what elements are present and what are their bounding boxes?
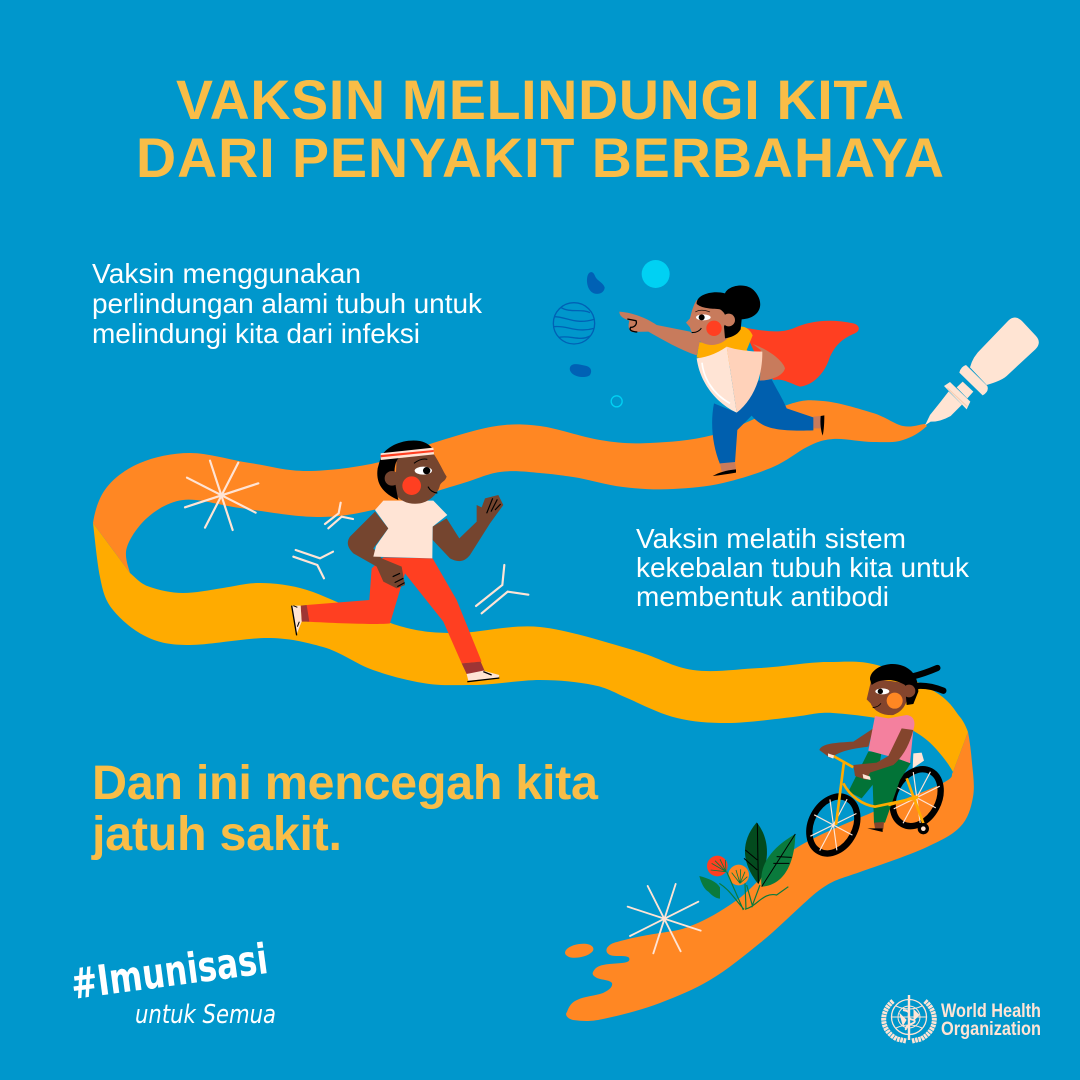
head [686, 299, 735, 345]
back shoe [292, 606, 302, 635]
hair [377, 441, 433, 500]
cape [743, 321, 859, 387]
trainer wheel [918, 823, 929, 834]
dropper ring [944, 382, 970, 409]
antibody small [325, 503, 353, 528]
shield [697, 347, 762, 413]
ear [903, 685, 915, 697]
cheek [706, 321, 722, 336]
text block: conclusion: jatuh sakit. [91, 807, 342, 861]
leg back [848, 752, 882, 798]
braids [912, 668, 943, 691]
cheek [887, 693, 903, 709]
illustration: plants and sparkle [628, 822, 795, 953]
ribbon: lower yellow band [93, 523, 968, 772]
text block: conclusion [91, 756, 599, 861]
rear wheel [883, 761, 950, 834]
character: runner [292, 441, 503, 682]
hair [697, 285, 760, 338]
icon: vaccine dropper bottle [925, 317, 1039, 425]
leg front [873, 758, 911, 823]
cuffs [301, 605, 485, 674]
back arm [753, 344, 785, 381]
ear [722, 314, 735, 326]
trousers [712, 379, 814, 464]
shirt [868, 715, 914, 763]
tall dark leaf [744, 822, 767, 884]
ear [385, 471, 399, 486]
icon: blue blob top [587, 272, 605, 294]
ankle and shoe [867, 822, 884, 832]
neck [957, 382, 973, 398]
face [395, 453, 447, 504]
text block: natural protection: melindungi kita dari infeksi [92, 318, 420, 349]
cheek [402, 476, 421, 495]
small leaf [699, 876, 720, 899]
face [867, 678, 908, 715]
icon: cyan circle [642, 260, 670, 288]
hair [870, 664, 918, 705]
pointing arm [619, 312, 700, 355]
mouth [692, 328, 701, 332]
headband [381, 448, 434, 460]
title: DARI PENYAKIT BERBAHAYA [136, 127, 944, 189]
emblem [884, 995, 934, 1041]
antibodies and sparkle near runner [185, 461, 528, 613]
character: superhero girl with shield [619, 285, 859, 476]
icon: striped planet germ [553, 303, 595, 344]
front wheel [800, 788, 867, 862]
grip [828, 753, 871, 780]
sparkle [185, 461, 258, 530]
eye [695, 310, 711, 320]
feet [713, 415, 824, 476]
fingers [627, 319, 637, 332]
text block: natural protection: perlindungan alami tubuh untuk [92, 288, 483, 319]
collar [959, 365, 988, 395]
red flower [707, 856, 728, 876]
sparkle [628, 884, 701, 953]
text block: antibodies: Vaksin melatih sistem [636, 523, 906, 554]
text block: antibodies: membentuk antibodi [636, 581, 889, 612]
text block: conclusion: Dan ini mencegah kita [92, 756, 599, 810]
text block: natural protection: Vaksin menggunakan [92, 258, 361, 289]
title [136, 69, 944, 189]
hand lines [393, 498, 501, 587]
bike saddle [913, 753, 924, 768]
icon: small ring [611, 396, 622, 407]
icon: blue blob lower [570, 364, 591, 377]
text block: antibodies [636, 523, 970, 612]
arm near [853, 728, 913, 780]
organization name: World Health [941, 1000, 1041, 1022]
orange flower [728, 865, 749, 885]
hashtag logo [68, 934, 276, 1030]
World Health Organization logo [884, 995, 1041, 1041]
antibody large [476, 565, 528, 613]
ribbon: upper orange band [93, 400, 927, 573]
text block: antibodies: kekebalan tubuh kita untuk [636, 552, 970, 583]
mouth [428, 487, 437, 493]
arms [348, 512, 405, 588]
organization name: Organization [941, 1018, 1041, 1040]
eye [875, 688, 889, 694]
green leaf [761, 834, 795, 887]
dropper tip [925, 391, 962, 425]
trousers [307, 557, 482, 663]
front shoe [467, 671, 499, 682]
eye [414, 459, 432, 475]
organization name [941, 1000, 1041, 1040]
illustration: floating germs [553, 260, 670, 407]
character: cyclist [800, 664, 950, 862]
stems [719, 872, 788, 910]
mouth [873, 703, 881, 708]
ribbon: winding vaccine path [93, 400, 974, 1021]
arm far [819, 728, 873, 758]
text block: natural protection [92, 258, 483, 349]
shirt [373, 501, 447, 558]
top [697, 327, 767, 371]
antibody mid [293, 550, 333, 578]
hashtag logo: #Imunisasi [68, 934, 271, 1009]
bottle body [970, 317, 1039, 385]
hashtag logo: untuk Semua [135, 1000, 276, 1030]
ribbon: bottom orange splash [566, 732, 974, 1021]
ribbon: splash droplet [565, 944, 593, 958]
title: VAKSIN MELINDUNGI KITA [176, 69, 904, 131]
bike frame [833, 756, 923, 825]
